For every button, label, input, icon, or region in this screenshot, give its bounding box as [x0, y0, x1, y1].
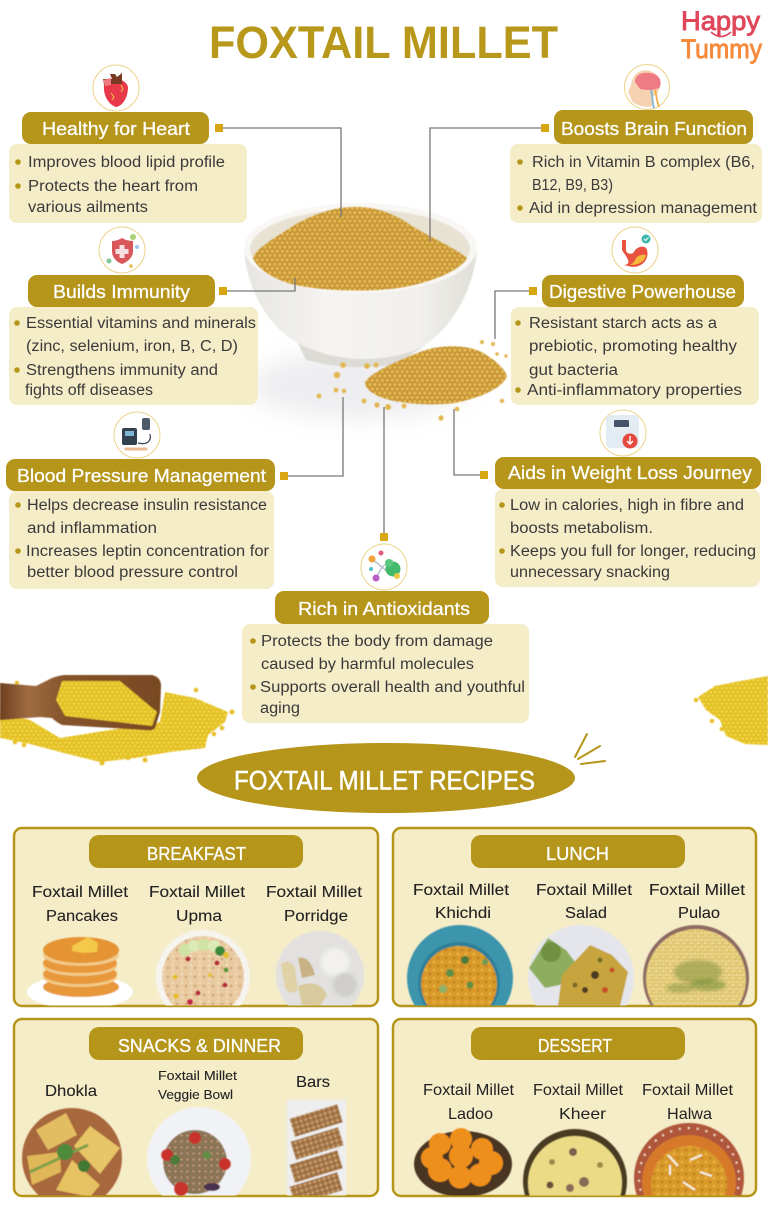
heading — [6, 459, 275, 491]
text block: gut bacteria — [529, 362, 618, 379]
connector: digestive — [495, 287, 537, 339]
recipe: khichdi: Khichdi — [435, 905, 491, 922]
card: Dessert — [393, 1019, 756, 1211]
heading — [89, 1027, 303, 1060]
text block: unnecessary snacking — [510, 564, 670, 581]
icon: brain — [624, 64, 670, 110]
heading: SNACKS & DINNER — [118, 1036, 281, 1056]
title: FOXTAIL MILLET — [209, 17, 558, 68]
recipe: porridge: Porridge — [284, 908, 348, 925]
icon: shield — [99, 227, 145, 273]
heading: Blood Pressure Management — [17, 465, 266, 486]
text block: Low in calories, high in fibre and — [510, 497, 744, 514]
text block: Resistant starch acts as a — [529, 315, 717, 332]
text block — [242, 624, 529, 723]
small millet pile — [317, 340, 508, 421]
recipe: pulao: Pulao — [678, 905, 720, 922]
recipe: pulao: Foxtail Millet — [649, 882, 746, 899]
recipe: bars — [287, 1074, 346, 1205]
recipe: pulao — [642, 884, 750, 1006]
heading: Healthy for Heart — [42, 118, 190, 139]
panel: Rich in Antioxidants — [242, 544, 529, 723]
card: Lunch — [392, 826, 758, 1008]
recipe: veggie bowl — [146, 1070, 252, 1196]
recipe: pancakes: Pancakes — [46, 908, 118, 925]
heading — [22, 112, 209, 144]
heading — [554, 110, 753, 144]
recipe: upma: Foxtail Millet — [149, 884, 246, 901]
panel: Blood Pressure Management — [6, 412, 275, 589]
text block: Protects the heart from — [28, 178, 198, 195]
recipe: dhokla: Dhokla — [45, 1083, 97, 1100]
connector: weight — [454, 409, 488, 479]
text block — [9, 144, 247, 223]
heading: Builds Immunity — [53, 281, 191, 302]
panel: Builds Immunity — [9, 227, 258, 405]
heading — [89, 835, 303, 868]
text block — [9, 307, 258, 405]
text block: Keeps you full for longer, reducing — [510, 543, 756, 560]
panel: Digestive Powerhouse — [511, 227, 759, 405]
logo: Happy Tummy: Happy — [681, 6, 761, 36]
text block: Protects the body from damage — [261, 633, 493, 650]
text block — [495, 489, 760, 587]
recipe: kheer: Kheer — [559, 1106, 607, 1123]
heading: Rich in Antioxidants — [298, 598, 470, 619]
panel: Healthy for Heart — [9, 65, 247, 223]
panel: Aids in Weight Loss Journey — [495, 410, 761, 587]
recipe: salad: Foxtail Millet — [536, 882, 633, 899]
text block: Increases leptin concentration for — [26, 543, 269, 560]
text block: Aid in depression management — [529, 200, 758, 217]
recipe: veggie bowl: Veggie Bowl — [158, 1087, 233, 1102]
recipe: pancakes — [27, 884, 133, 1009]
heading — [495, 457, 761, 489]
connector: antioxidants — [380, 407, 388, 541]
heading: Boosts Brain Function — [561, 118, 747, 139]
heading — [471, 835, 685, 868]
recipe: veggie bowl: Foxtail Millet — [158, 1068, 237, 1083]
text block: Essential vitamins and minerals — [26, 315, 256, 332]
recipe: ladoo — [414, 1082, 515, 1197]
icon: heart — [93, 65, 139, 111]
connector: brain — [430, 124, 549, 241]
image: spilled millet right — [694, 676, 768, 745]
text block: various ailments — [28, 199, 148, 216]
text block: Improves blood lipid profile — [28, 154, 225, 171]
heading: Aids in Weight Loss Journey — [508, 462, 753, 483]
recipe: halwa — [633, 1084, 745, 1196]
recipe: upma — [150, 886, 250, 1006]
recipe: khichdi: Foxtail Millet — [413, 882, 510, 899]
heading — [275, 591, 489, 624]
icon: sparkle lines — [575, 734, 605, 764]
heading: Digestive Powerhouse — [549, 281, 736, 302]
heading — [471, 1027, 685, 1060]
recipe: ladoo: Ladoo — [448, 1106, 493, 1123]
text block: caused by harmful molecules — [261, 656, 474, 673]
recipe: halwa: Foxtail Millet — [642, 1082, 734, 1099]
text block: aging — [260, 700, 300, 717]
recipes banner — [197, 743, 575, 813]
logo: Happy Tummy — [681, 6, 762, 64]
text block: Strengthens immunity and — [26, 362, 218, 379]
recipe: porridge — [267, 886, 364, 1006]
image: scoop with spilled millet — [0, 675, 234, 766]
recipe: pancakes: Foxtail Millet — [32, 884, 129, 901]
recipe: kheer — [522, 1084, 628, 1196]
icon: blood pressure monitor — [114, 412, 160, 458]
text block: fights off diseases — [25, 382, 153, 399]
recipe: bars: Bars — [296, 1074, 330, 1091]
text block: boosts metabolism. — [510, 520, 653, 537]
text block — [9, 491, 274, 589]
text block: and inflammation — [27, 520, 157, 537]
icon: stomach — [612, 227, 658, 273]
logo: Happy Tummy: Tummy — [681, 34, 762, 64]
recipe: salad: Salad — [565, 905, 607, 922]
icon: antioxidant molecule — [361, 544, 407, 590]
central image: bowl of foxtail millet — [244, 203, 508, 421]
recipe: porridge: Foxtail Millet — [266, 884, 363, 901]
recipe: kheer: Foxtail Millet — [533, 1082, 624, 1099]
text block: prebiotic, promoting healthy — [529, 338, 737, 355]
text block: (zinc, selenium, iron, B, C, D) — [26, 338, 238, 355]
text block — [510, 144, 762, 223]
icon: weighing scale — [600, 410, 646, 456]
heading: LUNCH — [546, 844, 609, 864]
text block: better blood pressure control — [27, 564, 238, 581]
recipe: upma: Upma — [176, 908, 222, 925]
recipe: salad — [528, 884, 634, 1006]
millet mound in bowl — [253, 207, 467, 291]
heading: BREAKFAST — [147, 844, 246, 864]
heading — [542, 275, 744, 307]
recipe: halwa: Halwa — [667, 1106, 712, 1123]
text block: Rich in Vitamin B complex (B6, — [532, 154, 755, 171]
recipes banner: FOXTAIL MILLET RECIPES — [234, 766, 535, 796]
connector: immunity — [219, 278, 295, 295]
card: Breakfast — [14, 828, 378, 1024]
text block: Supports overall health and youthful — [260, 679, 525, 696]
connector: blood pressure — [280, 397, 343, 480]
heading — [28, 275, 215, 307]
connector: heart — [215, 124, 341, 217]
text block: Helps decrease insulin resistance — [27, 497, 267, 514]
recipe: khichdi — [406, 884, 514, 1006]
text block — [511, 307, 759, 405]
heading: DESSERT — [538, 1036, 612, 1056]
recipe: ladoo: Foxtail Millet — [423, 1082, 515, 1099]
text block: Anti-inflammatory properties — [527, 382, 742, 399]
card: Snacks and Dinner — [14, 1019, 378, 1211]
text block: B12, B9, B3) — [532, 177, 613, 194]
panel: Boosts Brain Function — [510, 64, 762, 223]
recipe: dhokla — [22, 1083, 122, 1208]
